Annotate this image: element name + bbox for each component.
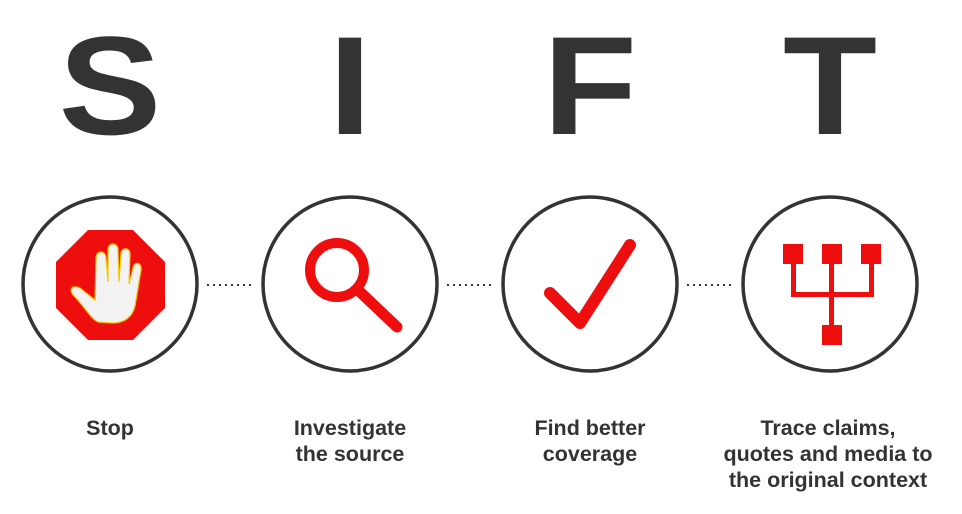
icon: stop sign hand — [56, 230, 165, 340]
label: find: Find better — [534, 416, 646, 440]
icon: magnifier — [310, 243, 397, 327]
label: find — [534, 416, 646, 466]
label: stop: Stop — [86, 416, 134, 440]
circle: stop — [23, 197, 197, 371]
connector 1 — [207, 284, 255, 286]
icon: check mark — [550, 245, 630, 323]
letter F: F — [543, 7, 637, 164]
connector 3 — [687, 284, 735, 286]
label: investigate — [294, 416, 406, 466]
label: investigate: Investigate — [294, 416, 406, 440]
label: trace: quotes and media to — [723, 442, 933, 466]
label: trace: Trace claims, — [760, 416, 896, 440]
letter S: S — [59, 7, 161, 164]
icon: trace tree — [783, 244, 881, 345]
letter T: T — [783, 7, 877, 164]
label: trace — [723, 416, 933, 492]
circle: investigate — [263, 197, 437, 371]
circle: find — [503, 197, 677, 371]
label: investigate: the source — [296, 442, 404, 466]
label: trace: the original context — [729, 468, 927, 492]
letter I: I — [329, 7, 371, 164]
connector 2 — [447, 284, 495, 286]
circle: trace — [743, 197, 917, 371]
label: find: coverage — [543, 442, 637, 466]
